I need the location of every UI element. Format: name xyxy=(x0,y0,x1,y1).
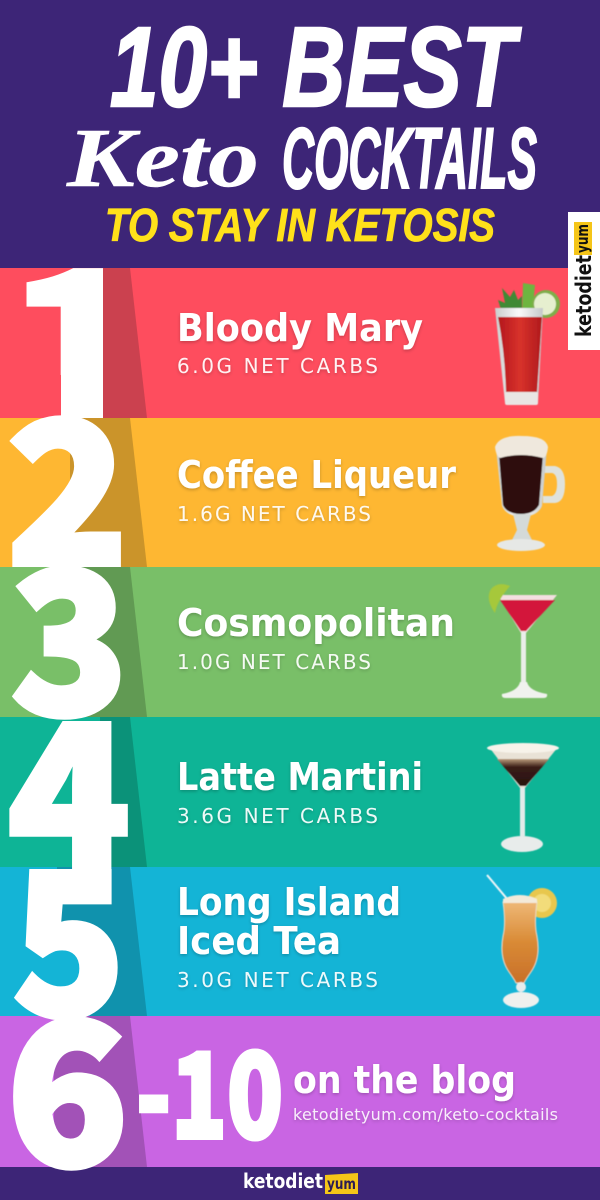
item 1 text: Bloody Mary xyxy=(177,306,423,350)
side logo tab: yum xyxy=(573,224,592,253)
band: red xyxy=(0,268,600,418)
icon: coffee mug xyxy=(495,436,565,551)
band: blue xyxy=(0,867,600,1016)
item 1 text: 6.0G NET CARBS xyxy=(177,354,378,378)
digit 5: 5 xyxy=(13,786,125,1072)
item 5 text xyxy=(177,880,401,992)
item 2 text: 1.6G NET CARBS xyxy=(177,502,371,526)
item 1 text xyxy=(177,306,423,378)
item 4 text: Latte Martini xyxy=(177,755,423,799)
band: teal xyxy=(0,717,600,867)
blog call to action xyxy=(293,1058,558,1124)
item 3 text: Cosmopolitan xyxy=(177,601,455,645)
item 4 text xyxy=(177,755,423,828)
item 2 text: Coffee Liqueur xyxy=(177,453,456,497)
footer logo: ketodiet xyxy=(243,1169,323,1193)
header background xyxy=(0,0,600,268)
band: purple xyxy=(0,1016,600,1167)
digit 4: 4 xyxy=(8,638,130,924)
side logo tab xyxy=(568,212,600,350)
item 3 text xyxy=(177,601,455,674)
item 2 text xyxy=(177,453,456,526)
band: amber xyxy=(0,418,600,567)
digit 1: 1 xyxy=(3,181,155,478)
blog call to action: on the blog xyxy=(293,1058,516,1102)
side logo tab: ketodiet xyxy=(572,255,596,337)
item 4 text: 3.6G NET CARBS xyxy=(177,804,378,828)
item 5 text: 3.0G NET CARBS xyxy=(177,968,378,992)
footer bar xyxy=(0,1167,600,1200)
blog call to action: ketodietyum.com/keto-cocktails xyxy=(293,1105,558,1124)
icon: bloody mary glass xyxy=(495,283,560,405)
title xyxy=(66,4,537,251)
digit 3: 3 xyxy=(11,485,128,771)
subtitle: TO STAY IN KETOSIS xyxy=(105,199,495,251)
icon: cosmopolitan glass xyxy=(489,584,557,698)
digit 2: 2 xyxy=(7,335,128,621)
item 5 text: Iced Tea xyxy=(177,919,341,963)
item 5 text: Long Island xyxy=(177,880,401,924)
title word: Keto: Keto xyxy=(66,112,259,205)
item 3 text: 1.0G NET CARBS xyxy=(177,650,371,674)
icon: long island glass xyxy=(487,875,557,1008)
band: green xyxy=(0,567,600,717)
big digits column xyxy=(9,268,281,1171)
footer logo: yum xyxy=(327,1175,356,1193)
icon: latte martini glass xyxy=(487,743,559,852)
range suffix -10: -10 xyxy=(136,1001,283,1172)
